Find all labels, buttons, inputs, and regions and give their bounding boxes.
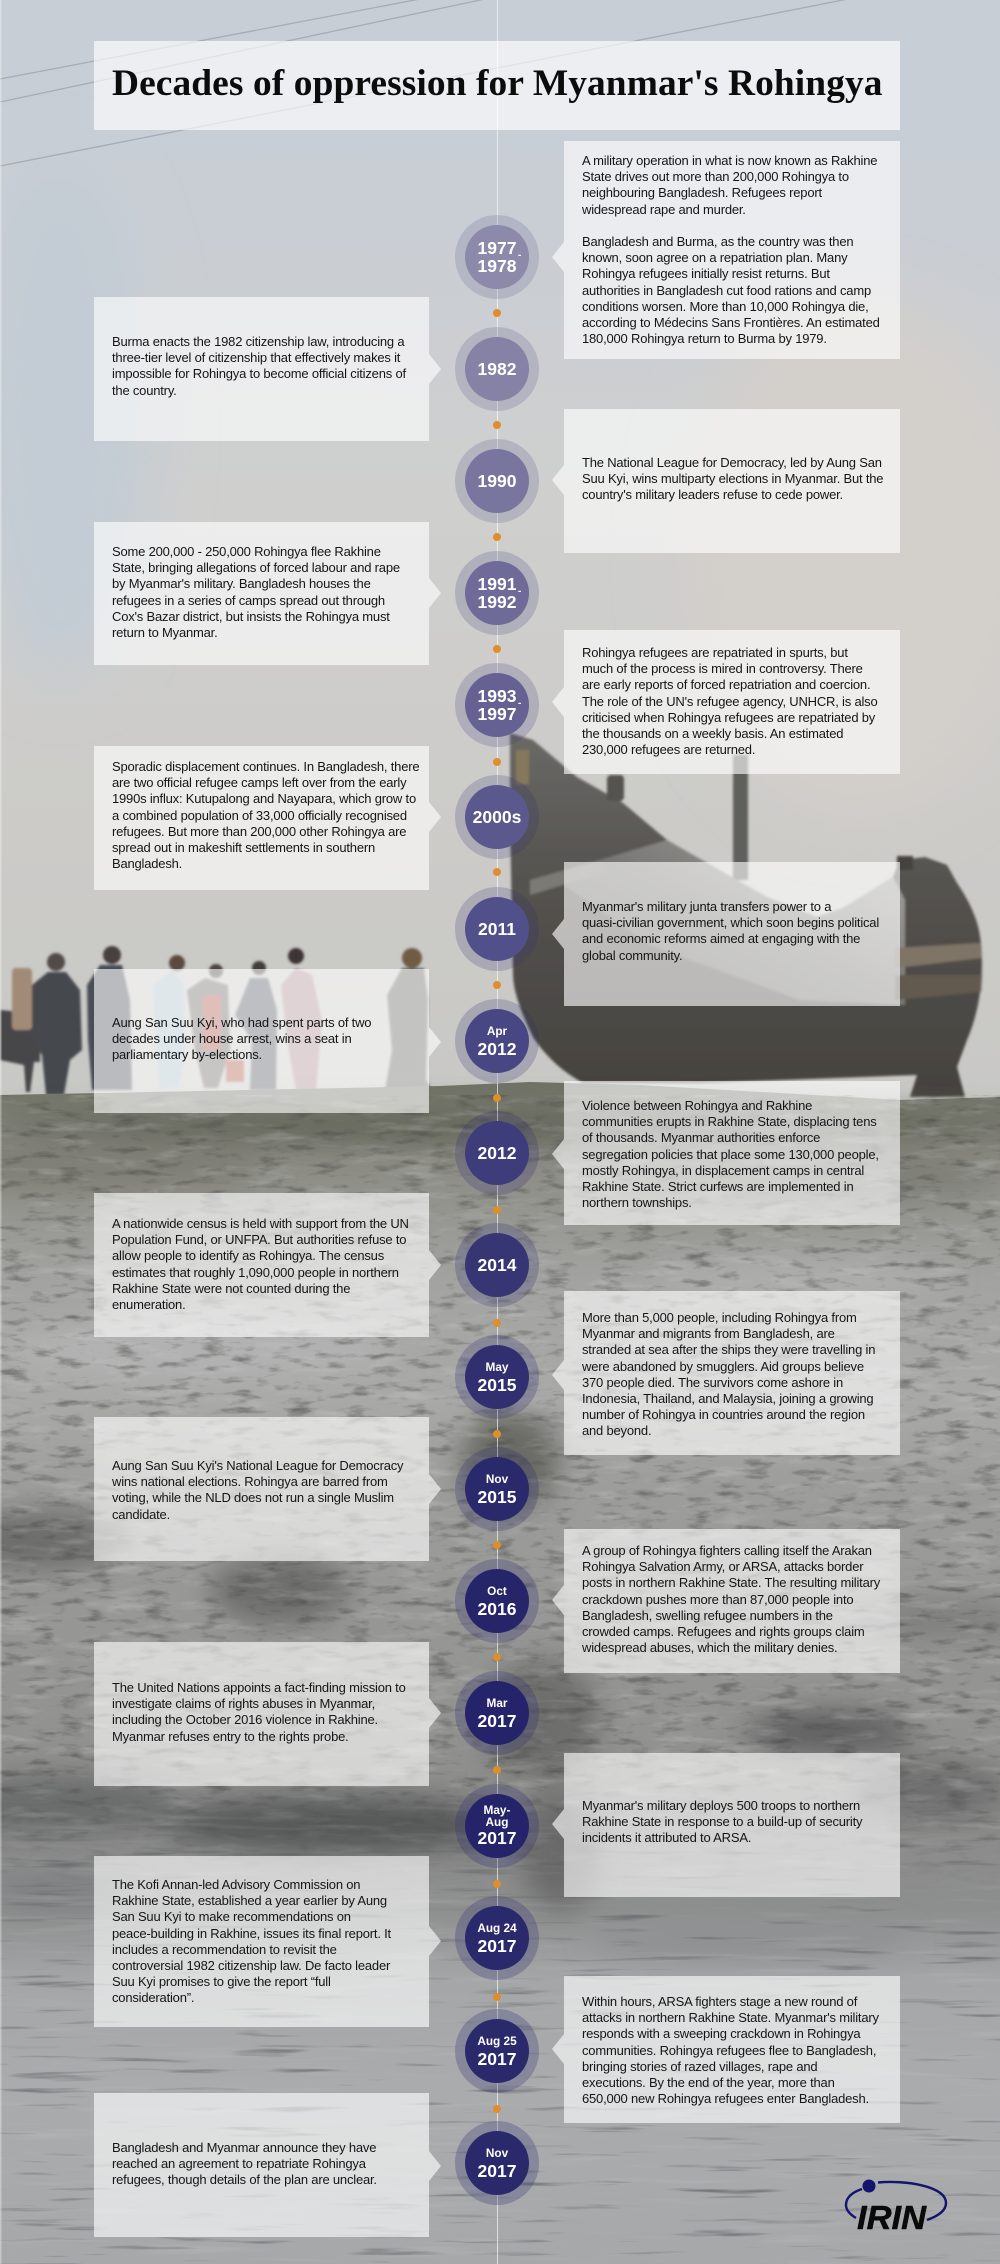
date marker: Aug 25 2017 xyxy=(455,2009,539,2093)
text: 1977-1978: widespread rape and murder. xyxy=(582,202,746,217)
text: May 2015: 370 people died. The survivors come ashore in xyxy=(582,1375,843,1390)
date marker: 2014: 2014 xyxy=(478,1255,516,1275)
text: Oct 2016: widespread abuses, which the military denies. xyxy=(582,1640,837,1655)
text: Aug 24 2017: consideration”. xyxy=(112,1990,194,2005)
date marker: May-Aug 2017 xyxy=(455,1784,539,1868)
date marker: Nov 2017 xyxy=(455,2121,539,2205)
text: 1993-1997: are early reports of forced repatriation and coercion. xyxy=(582,677,870,692)
date marker: 1977-1978: 1977 xyxy=(478,238,516,258)
text: 2011 xyxy=(582,899,879,963)
text: 1982: impossible for Rohingya to become official citizens of xyxy=(112,366,406,381)
text: Aug 24 2017 xyxy=(112,1877,391,2005)
date marker: May 2015 xyxy=(455,1335,539,1419)
date marker: 1991-1992: 1991 xyxy=(478,574,516,594)
panel: 2000s xyxy=(94,746,429,890)
text: 2000s: spread out in makeshift settlements in southern xyxy=(112,840,375,855)
text: 2000s xyxy=(112,759,419,871)
text: Aug 24 2017: The Kofi Annan-led Advisory Commission on xyxy=(112,1877,360,1892)
date marker: Aug 24 2017 xyxy=(455,1896,539,1980)
text: Nov 2015: voting, while the NLD does not run a single Muslim xyxy=(112,1490,394,1505)
text: 2012: Violence between Rohingya and Rakhine xyxy=(582,1098,812,1113)
text: 2012: communities erupts in Rakhine State, displacing tens xyxy=(582,1114,877,1129)
date marker: 1991-1992 xyxy=(455,551,539,635)
title xyxy=(94,41,900,130)
text: Apr 2012: decades under house arrest, wins a seat in xyxy=(112,1031,351,1046)
text: 2014: Population Fund, or UNFPA. But authorities refuse to xyxy=(112,1232,406,1247)
text: 1990: Suu Kyi, wins multiparty elections in Myanmar. But the xyxy=(582,471,883,486)
date marker: 1991-1992: 1992 xyxy=(478,592,516,612)
date marker: Oct 2016: 2016 xyxy=(478,1599,516,1619)
text: May-Aug 2017 xyxy=(582,1798,862,1845)
text: Nov 2017 xyxy=(112,2140,377,2187)
text: 1993-1997: the thousands on a weekly basis. An estimated xyxy=(582,726,843,741)
text: 2012: northern townships. xyxy=(582,1195,692,1210)
logo: IRIN xyxy=(844,2180,948,2236)
text: 1991-1992: return to Myanmar. xyxy=(112,625,218,640)
text: 2000s: refugees. But more than 200,000 other Rohingya are xyxy=(112,824,406,839)
date marker: Oct 2016: Oct xyxy=(487,1584,507,1598)
logo: IRIN: IRIN xyxy=(857,2199,927,2236)
text: Oct 2016: A group of Rohingya fighters calling itself the Arakan xyxy=(582,1543,872,1558)
text: Aug 24 2017: includes a recommendation to revisit the xyxy=(112,1942,337,1957)
panel: Mar 2017 xyxy=(94,1642,429,1786)
panel: Apr 2012 xyxy=(94,969,429,1113)
text: May 2015 xyxy=(582,1310,875,1438)
text: Oct 2016 xyxy=(582,1543,880,1655)
connector dot xyxy=(493,533,501,541)
text: 1977-1978: according to Médecins Sans Frontières. An estimated xyxy=(582,315,880,330)
panel: Oct 2016 xyxy=(564,1529,900,1673)
date marker: May-Aug 2017: May- xyxy=(484,1803,510,1817)
text: 2000s: 1990s influx: Kutupalong and Nayapara, which grow to xyxy=(112,791,416,806)
text: 1982: Burma enacts the 1982 citizenship law, introducing a xyxy=(112,334,404,349)
text: 1993-1997: much of the process is mired in controversy. There xyxy=(582,661,863,676)
text: May 2015: were abandoned by smugglers. Aid groups believe xyxy=(582,1359,864,1374)
text: 1991-1992: Some 200,000 - 250,000 Rohingya flee Rakhine xyxy=(112,544,381,559)
date marker: 1982 xyxy=(455,327,539,411)
text: Nov 2015 xyxy=(112,1458,404,1522)
text: 1991-1992: Cox's Bazar district, but insists the Rohingya must xyxy=(112,609,390,624)
date marker: Aug 25 2017: 2017 xyxy=(478,2049,516,2069)
text: 1993-1997 xyxy=(582,645,878,757)
connector dot xyxy=(493,1653,501,1661)
date marker: May 2015: May xyxy=(486,1360,508,1374)
date marker: Aug 24 2017: Aug 24 xyxy=(477,1921,517,1935)
text: 1977-1978: known, soon agree on a repatriation plan. Many xyxy=(582,250,847,265)
text: Mar 2017: investigate claims of rights abuses in Myanmar, xyxy=(112,1696,375,1711)
text: Oct 2016: Rohingya Salvation Army, or ARSA, attacks border xyxy=(582,1559,863,1574)
date marker: Nov 2017: Nov xyxy=(486,2146,508,2160)
text: Aug 25 2017 xyxy=(582,1994,879,2106)
text: 2012: Rakhine State. Strict curfews are implemented in xyxy=(582,1179,853,1194)
text: 1977-1978: authorities in Bangladesh cut food rations and camp xyxy=(582,283,871,298)
text: 2012: segregation policies that place some 130,000 people, xyxy=(582,1147,879,1162)
date marker: Aug 25 2017: Aug 25 xyxy=(477,2034,517,2048)
connector dot xyxy=(493,1541,501,1549)
date marker: 2014 xyxy=(455,1223,539,1307)
date marker: 1993-1997: - xyxy=(518,698,521,709)
panel: 2011 xyxy=(564,862,900,1006)
connector dot xyxy=(493,421,501,429)
date marker: 2011: 2011 xyxy=(478,919,516,939)
text: Aug 24 2017: controversial 1982 citizenship law. De facto leader xyxy=(112,1958,390,1973)
text: Mar 2017: including the October 2016 violence in Rakhine. xyxy=(112,1712,378,1727)
connector dot xyxy=(493,2105,501,2113)
text: Aug 24 2017: San Suu Kyi to make recommendations on xyxy=(112,1909,351,1924)
text: 1990 xyxy=(582,455,883,502)
text: Aug 25 2017: executions. By the end of the year, more than xyxy=(582,2075,835,2090)
text: Mar 2017: Myanmar refuses entry to the rights probe. xyxy=(112,1729,349,1744)
connector dot xyxy=(493,1766,501,1774)
date marker: 2011 xyxy=(455,887,539,971)
text: Aug 24 2017: Rakhine State, established a year earlier by Aung xyxy=(112,1893,387,1908)
text: 2000s: a combined population of 33,000 officially recognised xyxy=(112,808,407,823)
text: 2012 xyxy=(582,1098,879,1210)
text: Aug 24 2017: peace-building in Rakhine, issues its final report. It xyxy=(112,1926,391,1941)
text: 1982: the country. xyxy=(112,383,177,398)
panel: 2014 xyxy=(94,1193,429,1337)
connector dot xyxy=(493,1880,501,1888)
date marker: May-Aug 2017: Aug xyxy=(486,1815,508,1829)
text: 1991-1992: State, bringing allegations of forced labour and rape xyxy=(112,560,400,575)
text: 1977-1978: A military operation in what is now known as Rakhine xyxy=(582,153,877,168)
date marker: Nov 2017: 2017 xyxy=(478,2161,516,2181)
text: May-Aug 2017: incidents it attributed to ARSA. xyxy=(582,1830,751,1845)
panel: 1991-1992 xyxy=(94,522,429,665)
text: Nov 2015: wins national elections. Rohingya are barred from xyxy=(112,1474,388,1489)
text: 1990: country's military leaders refuse to cede power. xyxy=(582,487,843,502)
text: 1977-1978 xyxy=(582,153,880,346)
text: May 2015: and beyond. xyxy=(582,1423,651,1438)
text: 1993-1997: 230,000 refugees are returned. xyxy=(582,742,755,757)
date marker: 1977-1978: - xyxy=(518,250,521,261)
dark mud and water patches xyxy=(0,1107,1000,1958)
date marker: 1977-1978 xyxy=(455,215,539,299)
date marker: 1991-1992: - xyxy=(518,586,521,597)
panel: 2012 xyxy=(564,1081,900,1225)
text: May 2015: Myanmar and migrants from Bangladesh, are xyxy=(582,1326,835,1341)
connector dot xyxy=(493,868,501,876)
text: May 2015: number of Rohingya in countries around the region xyxy=(582,1407,865,1422)
text: 1990: The National League for Democracy, led by Aung San xyxy=(582,455,882,470)
date marker: 1977-1978: 1978 xyxy=(478,256,516,276)
date marker: 1990: 1990 xyxy=(478,471,516,491)
panel: Aug 25 2017 xyxy=(564,1976,900,2123)
text: 2000s: are two official refugee camps left over from the early xyxy=(112,775,406,790)
date marker: 2000s: 2000s xyxy=(473,807,521,827)
text: 2014: A nationwide census is held with support from the UN xyxy=(112,1216,409,1231)
date marker: Mar 2017: Mar xyxy=(486,1696,507,1710)
text: 1982 xyxy=(112,334,406,398)
text: Mar 2017: The United Nations appoints a fact-finding mission to xyxy=(112,1680,406,1695)
panel: 1982 xyxy=(94,297,429,441)
panel: 1990 xyxy=(564,409,900,553)
text: 1977-1978: Bangladesh and Burma, as the country was then xyxy=(582,234,853,249)
text: 1991-1992: by Myanmar's military. Bangladesh houses the xyxy=(112,576,371,591)
text: Aug 25 2017: communities. Rohingya refugees flee to Bangladesh, xyxy=(582,2043,876,2058)
connector dot xyxy=(493,1206,501,1214)
date marker: 1982: 1982 xyxy=(478,359,516,379)
text: 1977-1978: State drives out more than 200,000 Rohingya to xyxy=(582,169,849,184)
text: 1977-1978: neighbouring Bangladesh. Refugees report xyxy=(582,185,822,200)
text: 1991-1992 xyxy=(112,544,400,640)
date marker: Nov 2015: Nov xyxy=(486,1472,508,1486)
text: 1993-1997: criticised when Rohingya refugees are repatriated by xyxy=(582,710,875,725)
text: May-Aug 2017: Rakhine State in response to a build-up of security xyxy=(582,1814,862,1829)
text: 2012: mostly Rohingya, in displacement camps in central xyxy=(582,1163,864,1178)
connector dot xyxy=(493,309,501,317)
connector dot xyxy=(493,1094,501,1102)
connector dot xyxy=(493,981,501,989)
connector dot xyxy=(493,758,501,766)
panel: 1977-1978 xyxy=(564,141,900,359)
connector dot xyxy=(493,645,501,653)
date marker: Apr 2012 xyxy=(455,999,539,1083)
text: Oct 2016: Bangladesh, swelling refugee numbers in the xyxy=(582,1608,833,1623)
text: 1991-1992: refugees in a series of camps spread out through xyxy=(112,593,385,608)
text: 1982: three-tier level of citizenship that effectively makes it xyxy=(112,350,400,365)
panel: May-Aug 2017 xyxy=(564,1753,900,1897)
text: Aug 25 2017: Within hours, ARSA fighters stage a new round of xyxy=(582,1994,857,2009)
date marker: Aug 24 2017: 2017 xyxy=(478,1936,516,1956)
text: Oct 2016: crackdown pushes more than 87,000 people into xyxy=(582,1592,853,1607)
text: 1977-1978: Rohingya refugees initially resist returns. But xyxy=(582,266,830,281)
date marker: Apr 2012: Apr xyxy=(487,1024,507,1038)
date marker: Mar 2017 xyxy=(455,1671,539,1755)
text: Nov 2015: candidate. xyxy=(112,1507,170,1522)
text: 2014: allow people to identify as Rohingya. The census xyxy=(112,1248,384,1263)
text: 1977-1978: conditions worsen. More than 10,000 Rohingya die, xyxy=(582,299,868,314)
date marker: May 2015: 2015 xyxy=(478,1375,516,1395)
date marker: 1993-1997 xyxy=(455,663,539,747)
text: May 2015: Indonesia, Thailand, and Malaysia, joining a growing xyxy=(582,1391,873,1406)
text: Apr 2012 xyxy=(112,1015,371,1062)
text: 2014: Rakhine State were not counted during the xyxy=(112,1281,350,1296)
date marker: 1993-1997: 1997 xyxy=(478,704,516,724)
text: Aug 25 2017: attacks in northern Rakhine State. Myanmar's military xyxy=(582,2010,879,2025)
text: 2000s: Bangladesh. xyxy=(112,856,182,871)
text: Oct 2016: crowded camps. Refugees and rights groups claim xyxy=(582,1624,865,1639)
text: Nov 2017: refugees, though details of the plan are unclear. xyxy=(112,2172,377,2187)
date marker: Mar 2017: 2017 xyxy=(478,1711,516,1731)
panel: May 2015 xyxy=(564,1291,900,1455)
connector dot xyxy=(493,1993,501,2001)
text: 2012: of thousands. Myanmar authorities enforce xyxy=(582,1130,820,1145)
text: 2014: estimates that roughly 1,090,000 people in northern xyxy=(112,1265,399,1280)
text: Apr 2012: Aung San Suu Kyi, who had spent parts of two xyxy=(112,1015,371,1030)
text: 2011: and economic reforms aimed at engaging with the xyxy=(582,931,860,946)
text: Nov 2017: reached an agreement to repatriate Rohingya xyxy=(112,2156,366,2171)
timeline vertical line xyxy=(496,0,498,2264)
date marker: May-Aug 2017: 2017 xyxy=(478,1828,516,1848)
text: 2011: Myanmar's military junta transfers power to a xyxy=(582,899,831,914)
text: May-Aug 2017: Myanmar's military deploys 500 troops to northern xyxy=(582,1798,860,1813)
text: Apr 2012: parliamentary by-elections. xyxy=(112,1047,262,1062)
text: 2011: quasi-civilian government, which soon begins political xyxy=(582,915,879,930)
panel: 1993-1997 xyxy=(564,630,900,774)
text: 2014: enumeration. xyxy=(112,1297,185,1312)
text: 2011: global community. xyxy=(582,948,682,963)
date marker: Apr 2012: 2012 xyxy=(478,1039,516,1059)
date marker: 1990 xyxy=(455,439,539,523)
title: Decades of oppression for Myanmar's Rohingya xyxy=(112,63,883,104)
date marker: 2000s xyxy=(455,775,539,859)
date marker: Nov 2015: 2015 xyxy=(478,1487,516,1507)
text: Mar 2017 xyxy=(112,1680,406,1744)
date marker: Oct 2016 xyxy=(455,1559,539,1643)
panel: Nov 2015 xyxy=(94,1417,429,1561)
date marker: 2012: 2012 xyxy=(478,1143,516,1163)
text: Oct 2016: posts in northern Rakhine State. The resulting military xyxy=(582,1575,880,1590)
text: Aug 24 2017: Suu Kyi promises to give the report “full xyxy=(112,1974,331,1989)
date marker: Nov 2015 xyxy=(455,1447,539,1531)
text: 2014 xyxy=(112,1216,409,1312)
text: 1993-1997: The role of the UN's refugee agency, UNHCR, is also xyxy=(582,694,878,709)
text: Nov 2015: Aung San Suu Kyi's National League for Democracy xyxy=(112,1458,403,1473)
text: May 2015: More than 5,000 people, including Rohingya from xyxy=(582,1310,857,1325)
text: 1977-1978: 180,000 Rohingya return to Burma by 1979. xyxy=(582,331,827,346)
connector dot xyxy=(493,1319,501,1327)
connector dot xyxy=(493,1430,501,1438)
text: May 2015: stranded at sea after the ships they were travelling in xyxy=(582,1342,875,1357)
panel: Aug 24 2017 xyxy=(94,1856,429,2027)
date marker: 1993-1997: 1993 xyxy=(478,686,516,706)
text: Aug 25 2017: bringing stories of razed villages, rape and xyxy=(582,2059,817,2074)
date marker: 2012 xyxy=(455,1111,539,1195)
text: Nov 2017: Bangladesh and Myanmar announce they have xyxy=(112,2140,376,2155)
text: Aug 25 2017: responds with a sweeping crackdown in Rohingya xyxy=(582,2026,860,2041)
text: Aug 25 2017: 650,000 new Rohingya refugees enter Bangladesh. xyxy=(582,2091,869,2106)
text: 1993-1997: Rohingya refugees are repatriated in spurts, but xyxy=(582,645,848,660)
panel: Nov 2017 xyxy=(94,2093,429,2237)
text: 2000s: Sporadic displacement continues. In Bangladesh, there xyxy=(112,759,419,774)
